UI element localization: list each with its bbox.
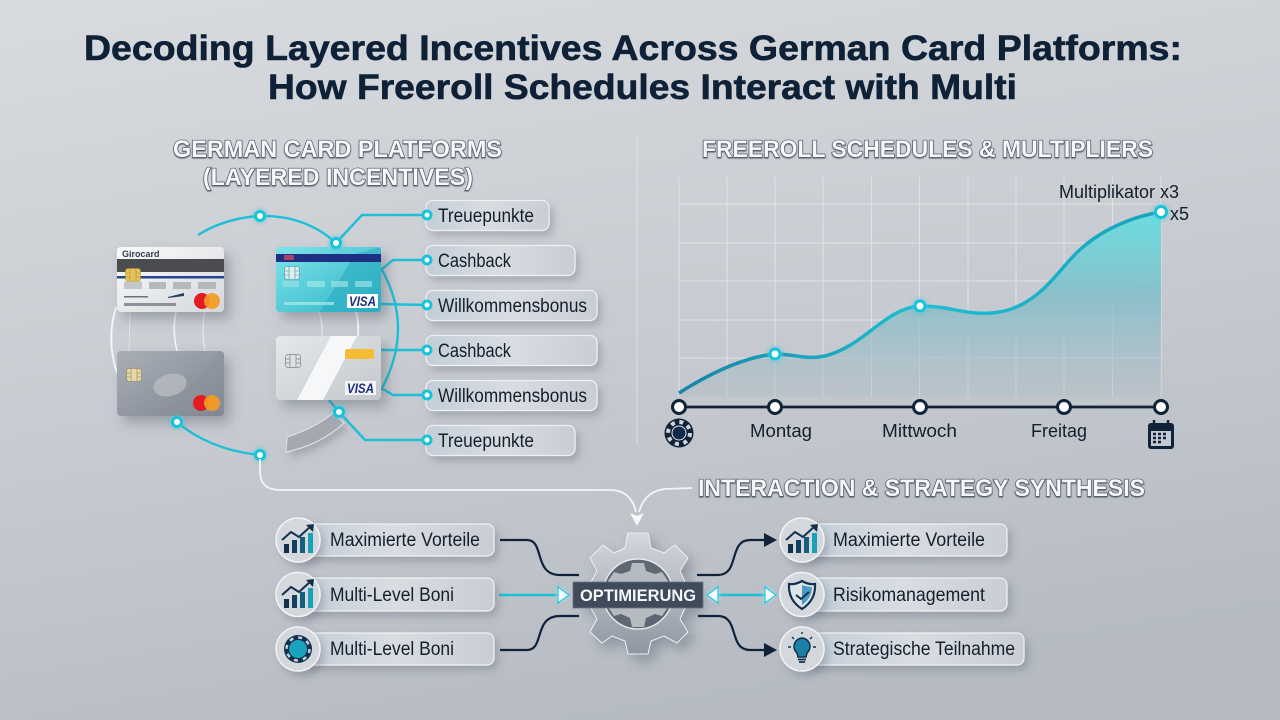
- card: teal Visa: VISA: [349, 294, 376, 309]
- connector nodes: [172, 212, 344, 460]
- label: Treuepunkte: Treuepunkte: [438, 431, 534, 452]
- heading: freeroll schedules: FREEROLL SCHEDULES & MULTIPLIERS: [702, 136, 1153, 163]
- item: Maximierte Vorteile left: Maximierte Vorteile: [330, 530, 480, 551]
- heading: interaction and strategy synthesis: INTERACTION & STRATEGY SYNTHESIS: [698, 475, 1145, 502]
- input connectors: [499, 540, 579, 650]
- label: Willkommensbonus: Willkommensbonus: [438, 386, 587, 407]
- item: Multi-Level Boni lower: [276, 627, 494, 671]
- card: teal Visa: [276, 247, 381, 312]
- panel: interaction and strategy synthesis: [260, 459, 1145, 671]
- label: Willkommensbonus: [423, 380, 597, 410]
- item: Strategische Teilnahme: Strategische Teilnahme: [833, 639, 1015, 660]
- gear: optimisation: [580, 533, 697, 654]
- title: [84, 29, 1182, 107]
- arrow: cards into optimisation: [260, 459, 692, 526]
- card: silver Visa: [276, 336, 381, 400]
- icon: curved metal tab: [286, 413, 344, 452]
- label: Cashback: [423, 336, 597, 366]
- panel: German card platforms: [111, 136, 597, 460]
- item: Maximierte Vorteile right: [780, 518, 1007, 562]
- multiplier labels: [1059, 182, 1189, 224]
- card: Girocard white: Girocard: [122, 249, 160, 259]
- item: Risikomanagement: [780, 572, 1007, 616]
- item: Risikomanagement: Risikomanagement: [833, 585, 986, 606]
- item: Multi-Level Boni upper: [276, 572, 494, 616]
- icon: poker chip: [664, 418, 694, 448]
- item: Multi-Level Boni upper: Multi-Level Boni: [330, 585, 454, 606]
- label: Treuepunkte: [423, 426, 575, 456]
- data points: [770, 206, 1166, 359]
- item: Strategische Teilnahme: [780, 627, 1024, 671]
- chart area fill: [679, 212, 1161, 397]
- item: Maximierte Vorteile right: Maximierte Vorteile: [833, 530, 985, 551]
- heading: German card platforms: [173, 136, 502, 191]
- item: Multi-Level Boni lower: Multi-Level Boni: [330, 639, 454, 660]
- item: Maximierte Vorteile left: [276, 518, 494, 562]
- icon: calendar: [1148, 420, 1174, 449]
- label: Treuepunkte: [423, 200, 549, 230]
- banner: Optimierung: OPTIMIERUNG: [580, 586, 696, 605]
- panel: freeroll schedules and multipliers: [664, 136, 1189, 449]
- label: Willkommensbonus: [423, 290, 597, 320]
- label: Cashback: Cashback: [438, 341, 511, 362]
- timeline axis: Mittwoch: [882, 420, 957, 441]
- title: Decoding Layered Incentives Across German Card Platforms:: [84, 29, 1182, 68]
- multiplier labels: x5: [1170, 204, 1189, 224]
- timeline axis: [672, 400, 1168, 441]
- timeline axis: Montag: [750, 420, 812, 441]
- heading: German card platforms: (LAYERED INCENTIVES): [203, 164, 473, 191]
- banner: Optimierung: [573, 582, 703, 608]
- label: Treuepunkte: Treuepunkte: [438, 206, 534, 227]
- output connectors: [697, 533, 777, 657]
- card: Girocard white: [117, 247, 224, 312]
- card: silver Visa: VISA: [347, 381, 374, 396]
- line chart: [679, 177, 1189, 397]
- timeline axis: Freitag: [1031, 420, 1087, 441]
- title: How Freeroll Schedules Interact with Multi: [268, 68, 1017, 107]
- connector lines: [111, 215, 427, 455]
- multiplier labels: Multiplikator x3: [1059, 182, 1179, 202]
- card: grey metal: [117, 351, 224, 416]
- chart curve: [679, 212, 1161, 393]
- heading: German card platforms: GERMAN CARD PLATFORMS: [173, 136, 502, 163]
- label: Willkommensbonus: Willkommensbonus: [438, 296, 587, 317]
- label: Cashback: Cashback: [438, 251, 511, 272]
- label: Cashback: [423, 246, 575, 276]
